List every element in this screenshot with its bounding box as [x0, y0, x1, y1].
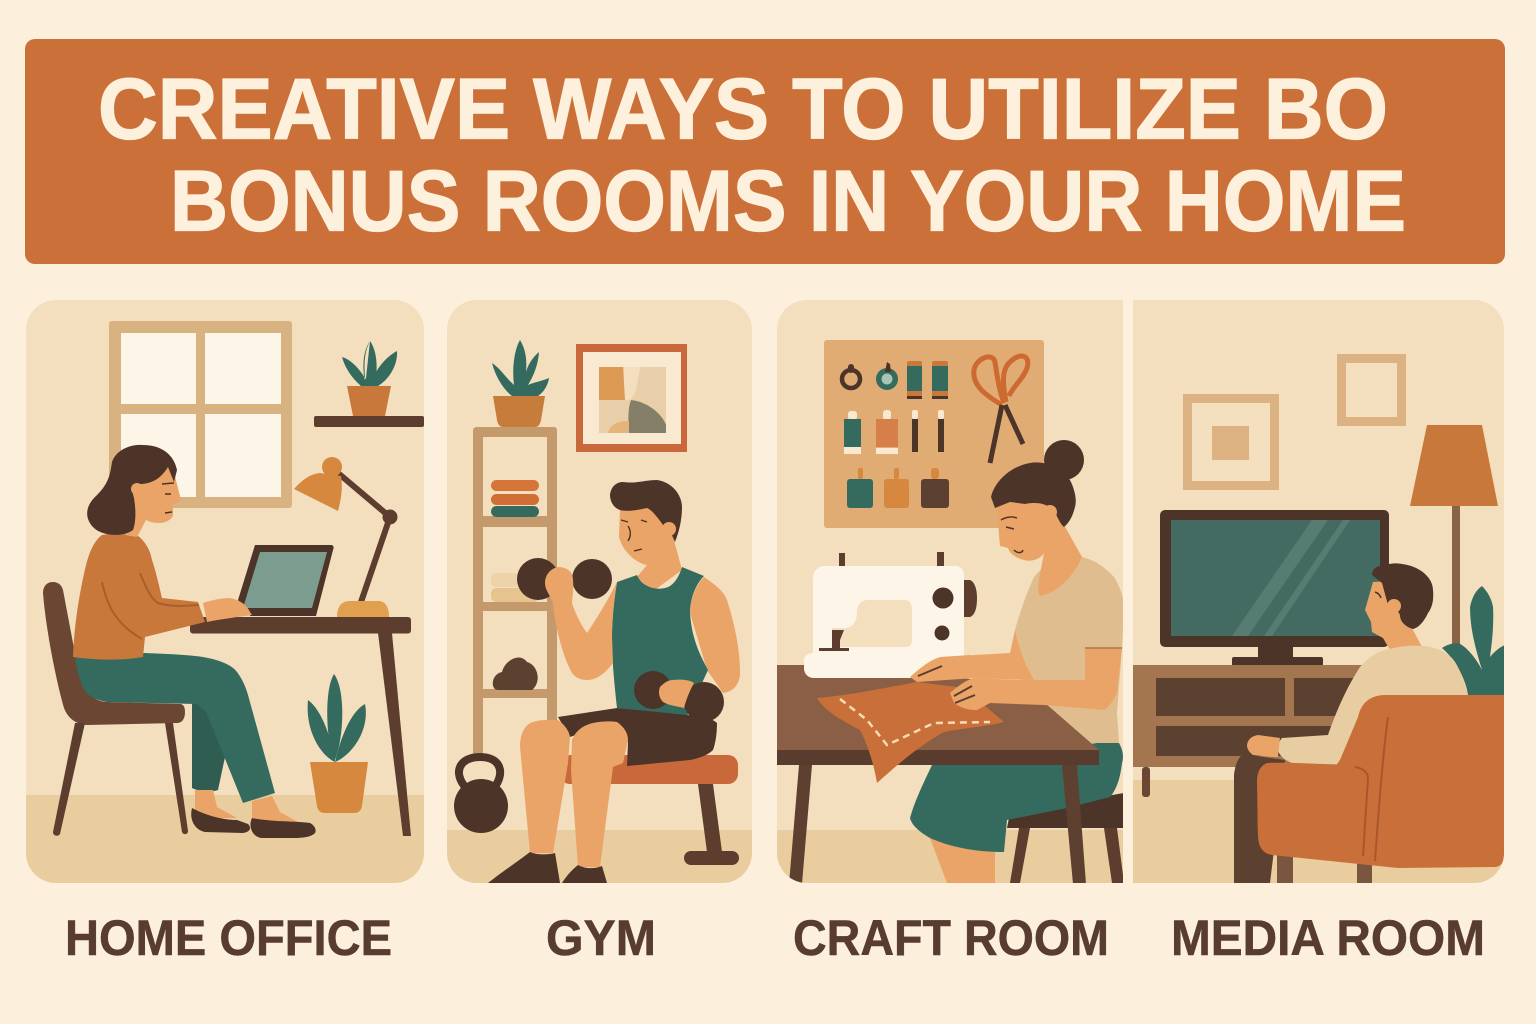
- figure: man on sofa: [1234, 563, 1504, 883]
- panel divider: [1123, 300, 1133, 883]
- trousers: [75, 653, 275, 803]
- far arm: [690, 577, 740, 693]
- panel: gym: [447, 300, 752, 883]
- icon: large picture frame: [1183, 394, 1279, 490]
- bench: [560, 755, 739, 865]
- hand: [203, 598, 252, 622]
- tank top: [612, 567, 708, 716]
- title line 2: BONUS ROOMS IN YOUR HOME: [170, 154, 1406, 250]
- hair: [87, 445, 177, 535]
- panel: home office: [26, 300, 424, 883]
- raised arm: [553, 582, 617, 680]
- label: media room: MEDIA ROOM: [1171, 910, 1485, 966]
- panel: media room: [1133, 300, 1505, 883]
- icon: floor plant: [308, 674, 368, 813]
- neck and face: [1365, 580, 1422, 650]
- desk: [190, 617, 411, 836]
- facial features: [1375, 592, 1381, 598]
- icon: orange armchair: [1257, 695, 1504, 868]
- shirt: [1015, 556, 1124, 743]
- icon: wall shelf with plant: [314, 341, 424, 427]
- label: gym: GYM: [546, 910, 656, 966]
- title banner: [25, 39, 1505, 264]
- far arm: [910, 630, 1034, 680]
- icon: television: [1160, 510, 1389, 666]
- icon: resting dumbbell: [634, 671, 724, 722]
- feet: [195, 790, 237, 818]
- hand: [1247, 735, 1280, 757]
- neck and face: [619, 505, 682, 592]
- icon: shelving unit: [473, 427, 557, 760]
- icon: sewing machine: [804, 552, 977, 678]
- icon: framed art: [576, 344, 687, 452]
- icon: laptop: [238, 545, 334, 616]
- panel: craft room: [777, 300, 1124, 884]
- figure: woman at laptop: [73, 445, 316, 838]
- icon: shelf plant: [492, 340, 549, 427]
- hair: [1372, 563, 1433, 629]
- shorts: [558, 708, 717, 766]
- icon: chair: [43, 582, 188, 836]
- icon: small picture frame: [1337, 354, 1406, 426]
- figure: man with dumbbells: [488, 480, 740, 883]
- table: [777, 665, 1099, 884]
- sweater: [73, 534, 205, 660]
- icon: desk lamp: [294, 457, 398, 617]
- neck: [1038, 525, 1082, 596]
- facial features: [162, 483, 174, 513]
- sweater: [1278, 646, 1468, 765]
- icon: fabric: [817, 682, 1004, 783]
- near legs: [520, 720, 570, 853]
- face: [125, 465, 181, 537]
- sewing arm and hands: [910, 648, 1122, 710]
- icon: window: [109, 321, 292, 508]
- icon: stool: [1007, 793, 1124, 883]
- head: [991, 440, 1084, 561]
- icon: kettlebell: [454, 757, 508, 833]
- label: craft room: CRAFT ROOM: [793, 910, 1109, 966]
- figure: woman sewing: [910, 525, 1124, 883]
- icon: tv console: [1133, 665, 1363, 797]
- icon: floor lamp: [1410, 425, 1498, 655]
- icon: pegboard with tools: [824, 340, 1044, 528]
- title line 1: CREATIVE WAYS TO UTILIZE BO: [98, 62, 1388, 158]
- facial features: [621, 520, 647, 551]
- shoes: [488, 852, 560, 883]
- label: home office: HOME OFFICE: [65, 910, 392, 966]
- icon: chair feet: [1277, 855, 1372, 883]
- facial features: [1001, 517, 1023, 553]
- back trouser leg: [192, 700, 225, 791]
- icon: scissors: [974, 356, 1028, 463]
- trousers: [1234, 754, 1285, 883]
- hair: [610, 480, 682, 542]
- icon: corner plant: [1442, 586, 1505, 695]
- leg: [930, 838, 995, 883]
- icon: raised dumbbell: [517, 558, 612, 604]
- skirt: [910, 743, 1123, 852]
